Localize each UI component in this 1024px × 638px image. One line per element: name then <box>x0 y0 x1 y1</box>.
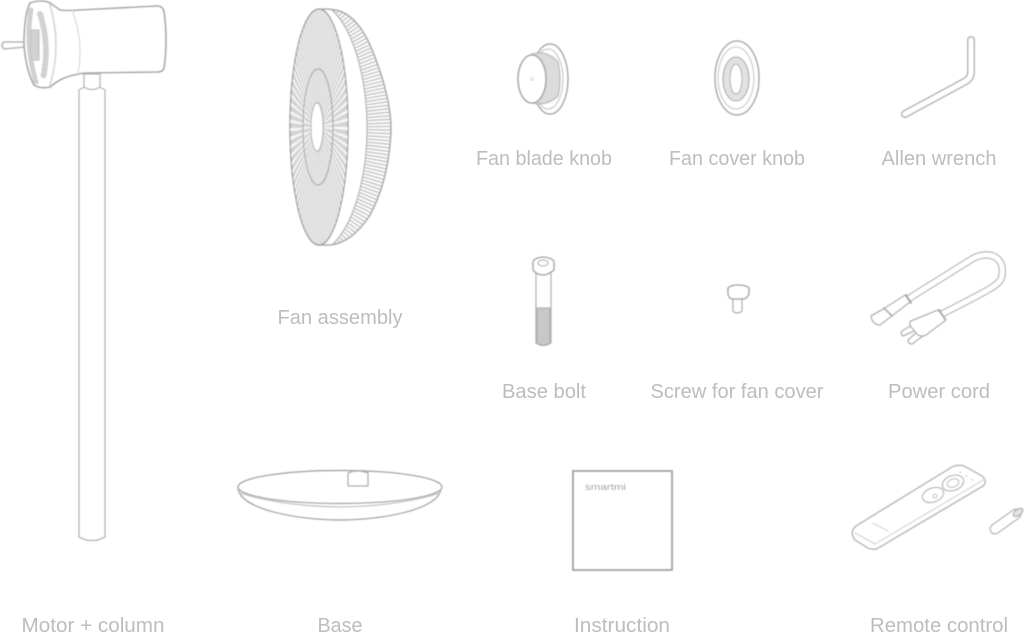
button two <box>940 472 966 494</box>
plug band <box>939 310 945 319</box>
knob cap <box>518 55 546 103</box>
bolt thread <box>537 308 550 345</box>
icon: allen wrench <box>905 40 971 114</box>
label: fan cover knob: Fan cover knob <box>669 148 805 170</box>
motor housing <box>24 1 166 88</box>
label: motor + column: Motor + column <box>22 615 164 637</box>
label: fan blade knob: Fan blade knob <box>476 148 612 170</box>
icon: power cord <box>871 255 1002 344</box>
column neck <box>84 74 100 90</box>
icon: screw for fan cover <box>728 285 749 313</box>
bolt head <box>533 257 554 275</box>
battery outline <box>995 514 1016 529</box>
rim white band <box>324 9 367 245</box>
flange inner ring <box>533 49 563 109</box>
outer blade ribs <box>297 39 341 215</box>
battery end <box>1012 507 1024 518</box>
indicator dots <box>960 472 974 481</box>
fan rim <box>318 9 391 245</box>
rib band <box>326 4 382 250</box>
battery interior <box>995 514 1016 529</box>
fan hub hole <box>311 103 323 151</box>
inner blade ribs <box>308 85 328 169</box>
icon: instruction booklet <box>573 471 672 570</box>
cord outline <box>908 255 1002 314</box>
bolt socket <box>538 260 548 266</box>
remote body <box>852 465 985 549</box>
wrench interior <box>905 40 971 114</box>
icon: fan cover knob <box>715 41 759 115</box>
label: instruction: Instruction <box>574 615 670 637</box>
motor face detail <box>50 5 56 85</box>
motor shaft <box>2 42 24 49</box>
label: base bolt: Base bolt <box>502 381 586 403</box>
knob ribs <box>532 53 560 104</box>
base stub <box>348 471 368 486</box>
button two inner <box>946 477 960 489</box>
rim outline <box>318 9 391 245</box>
base lip <box>240 493 440 507</box>
lower mark <box>873 523 888 531</box>
icon: base <box>238 470 442 520</box>
wrench outline <box>905 40 971 114</box>
inner ring <box>303 69 333 185</box>
remote front edge <box>855 479 985 544</box>
plug pin <box>901 325 916 336</box>
base underside <box>238 488 441 520</box>
button one <box>920 485 946 505</box>
label: power cord: Power cord <box>888 381 990 403</box>
screw shank <box>733 298 742 313</box>
icon: base bolt <box>533 257 554 346</box>
label: remote control: Remote control <box>870 615 1008 637</box>
base top plate <box>238 470 442 504</box>
icon: fan blade knob <box>518 44 568 114</box>
button one dot <box>933 494 937 498</box>
plug pin second <box>908 331 923 344</box>
knob centre dot <box>530 78 534 80</box>
label: screw for fan cover: Screw for fan cover <box>650 381 824 403</box>
strain relief <box>906 295 911 303</box>
column <box>79 86 105 540</box>
bolt shank <box>536 273 551 346</box>
booklet brand: smartmi <box>585 482 626 493</box>
plug body <box>910 310 946 336</box>
outer ring <box>715 41 759 115</box>
ribbed collar <box>723 57 749 101</box>
fan face <box>290 9 348 245</box>
icon: fan assembly <box>290 4 391 250</box>
connector <box>871 295 910 325</box>
second ring <box>718 47 754 109</box>
housing seam <box>72 10 80 74</box>
label: allen wrench: Allen wrench <box>882 148 996 170</box>
collar opening <box>730 64 742 94</box>
icon: remote control <box>852 465 985 549</box>
motor ring ribs <box>40 14 46 78</box>
label: base: Base <box>318 615 362 637</box>
label: fan assembly: Fan assembly <box>278 307 402 329</box>
cord interior <box>908 255 1002 314</box>
motor centre hub <box>31 30 39 60</box>
icon: battery <box>995 507 1024 529</box>
connector band <box>884 308 892 316</box>
screw head <box>728 285 749 299</box>
rim ribs <box>334 10 391 244</box>
booklet cover <box>573 471 672 570</box>
icon: motor and column <box>2 1 166 540</box>
flange <box>532 44 568 114</box>
motor face ring <box>29 10 36 82</box>
rim inner line <box>332 10 367 245</box>
